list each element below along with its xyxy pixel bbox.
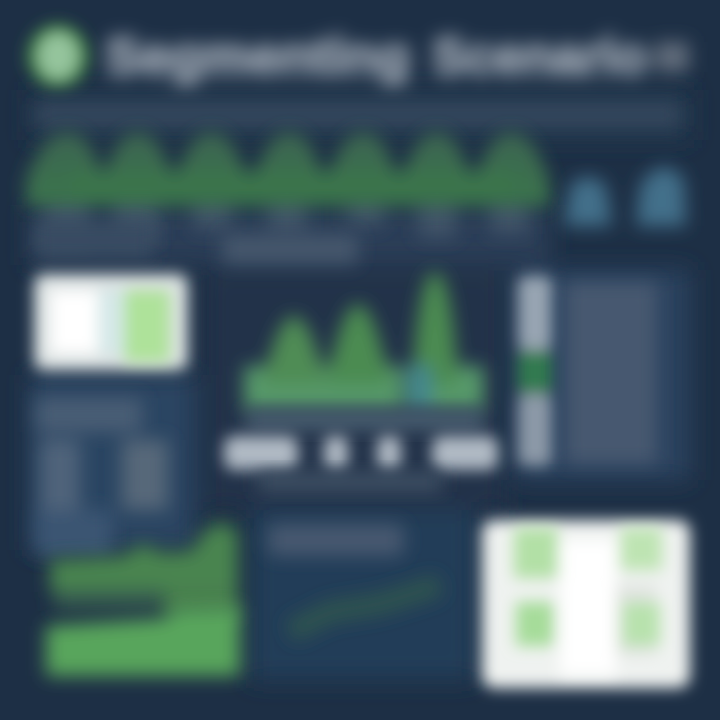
background panel glow (30, 90, 690, 680)
chart baseline (246, 410, 484, 430)
grid highlights (514, 528, 662, 675)
text block left (35, 222, 153, 258)
blue banner peaks (564, 167, 686, 226)
green wave banner (26, 132, 550, 206)
subtitle (36, 103, 680, 127)
line chart trend (290, 585, 440, 632)
icon: green circle (26, 23, 90, 89)
title: Segmenting (105, 28, 410, 86)
panel: white grid card (482, 520, 690, 688)
area chart center (244, 272, 484, 410)
lower bars (46, 606, 240, 676)
panel: white chart card (34, 274, 188, 370)
text block center (222, 234, 358, 264)
chart legend pills (224, 436, 498, 470)
caption below chart (258, 472, 442, 492)
title (105, 28, 689, 86)
list panel right (518, 276, 657, 466)
line chart heading (268, 524, 404, 556)
text panel left (36, 398, 168, 556)
title: Scenario (432, 28, 647, 86)
banner columns beneath wave (45, 185, 528, 245)
list markers (518, 276, 552, 466)
list text (565, 282, 657, 464)
panel: green bar chart (46, 522, 240, 676)
upper bars (50, 522, 238, 618)
